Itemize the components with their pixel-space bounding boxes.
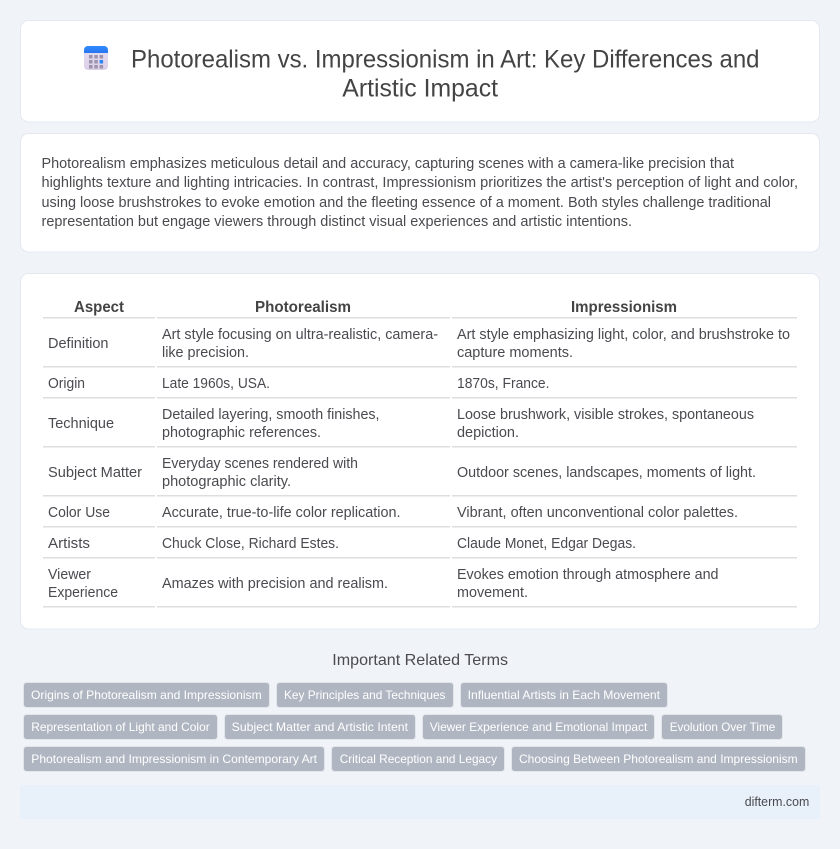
table row: Technique [43,407,797,448]
footer: difterm.com [745,794,809,809]
tag: Choosing Between Photorealism and Impressionism [519,752,798,766]
table header [43,299,797,318]
panel: introduction [20,134,820,252]
tag [460,682,668,708]
table header: Photorealism [255,299,351,316]
panel: related term tags [24,682,806,772]
table row: Definition: Art style emphasizing light, color, and brushstroke to [457,327,790,343]
text block: intro paragraph: using loose brushstrokes to evoke emotion and the fleeting essence of a moment. Both styles challenge traditional [42,195,771,211]
table row: Viewer Experience: Evokes emotion through atmosphere and [457,567,718,583]
table row: Subject Matter: Outdoor scenes, landscapes, moments of light. [457,465,756,481]
table row: Viewer Experience: Experience [48,585,118,601]
tag [662,714,782,740]
tag: Critical Reception and Legacy [340,752,497,766]
tag: Representation of Light and Color [31,720,210,734]
icon: calendar [84,46,108,70]
text block: intro paragraph: Photorealism emphasizes meticulous detail and accuracy, capturing scenes with a camera-like precision that [42,156,734,172]
table row: Artists: Chuck Close, Richard Estes. [162,536,339,552]
tag: Photorealism and Impressionism in Contemporary Art [31,752,318,766]
tag [24,714,218,740]
table row: Viewer Experience: movement. [457,585,528,601]
table row: Definition: Definition [48,336,108,352]
tag [332,746,504,772]
tag: Influential Artists in Each Movement [468,688,661,702]
panel: comparison table [20,274,820,629]
table row: Subject Matter: Everyday scenes rendered with [162,456,358,472]
table row: Definition [43,327,797,368]
text block: intro paragraph: representation but engage viewers through distinct visual experiences and artistic intentions. [42,214,632,230]
table row: Color Use: Color Use [48,505,110,521]
title: Artistic Impact [342,74,498,102]
tag [512,746,806,772]
table row: Artists: Claude Monet, Edgar Degas. [457,536,636,552]
table row: Artists [43,536,797,558]
table header: Impressionism [571,299,677,316]
tag: Evolution Over Time [670,720,776,734]
footer [20,785,820,819]
table row: Technique: photographic references. [162,425,321,441]
tag: Viewer Experience and Emotional Impact [430,720,648,734]
table row: Subject Matter [43,456,797,496]
table row: Origin: Origin [48,376,85,392]
title: Photorealism vs. Impressionism in Art: Key Differences and [131,46,760,74]
table row: Origin: Late 1960s, USA. [162,376,270,392]
panel: title card [20,20,820,122]
table row: Viewer Experience: Viewer [48,567,91,583]
table row: Technique: Detailed layering, smooth finishes, [162,407,380,423]
table row: Definition: like precision. [162,345,249,361]
table row: Technique: Technique [48,416,114,432]
tag [422,714,654,740]
title [131,46,760,102]
text block: intro paragraph [42,156,798,230]
tag: Origins of Photorealism and Impressionism [31,688,262,702]
table row: Color Use: Vibrant, often unconventional color palettes. [457,505,738,521]
text block: intro paragraph: highlights texture and lighting intricacies. In contrast, Impressionism prioritizes the artist's perception of light and color, [42,175,798,191]
heading: related terms: Important Related Terms [332,652,508,669]
table row: Definition: capture moments. [457,345,573,361]
tag [24,746,324,772]
table row: Color Use: Accurate, true-to-life color replication. [162,505,400,521]
tag [224,714,416,740]
table row: Artists: Artists [48,536,90,552]
table row: Color Use [43,505,797,528]
tag [276,682,454,708]
tag: Key Principles and Techniques [284,688,446,702]
table row: Subject Matter: photographic clarity. [162,474,291,490]
table row: Technique: Loose brushwork, visible strokes, spontaneous [457,407,754,423]
table row: Viewer Experience [43,567,797,608]
table row: Viewer Experience: Amazes with precision and realism. [162,576,388,592]
table row: Technique: depiction. [457,425,519,441]
table row: Definition: Art style focusing on ultra-realistic, camera- [162,327,438,343]
table row: Origin: 1870s, France. [457,376,550,392]
table row: Origin [43,376,797,398]
tag [24,682,270,708]
tag: Subject Matter and Artistic Intent [232,720,409,734]
table row: Subject Matter: Subject Matter [48,465,142,481]
table header: Aspect [74,299,124,316]
